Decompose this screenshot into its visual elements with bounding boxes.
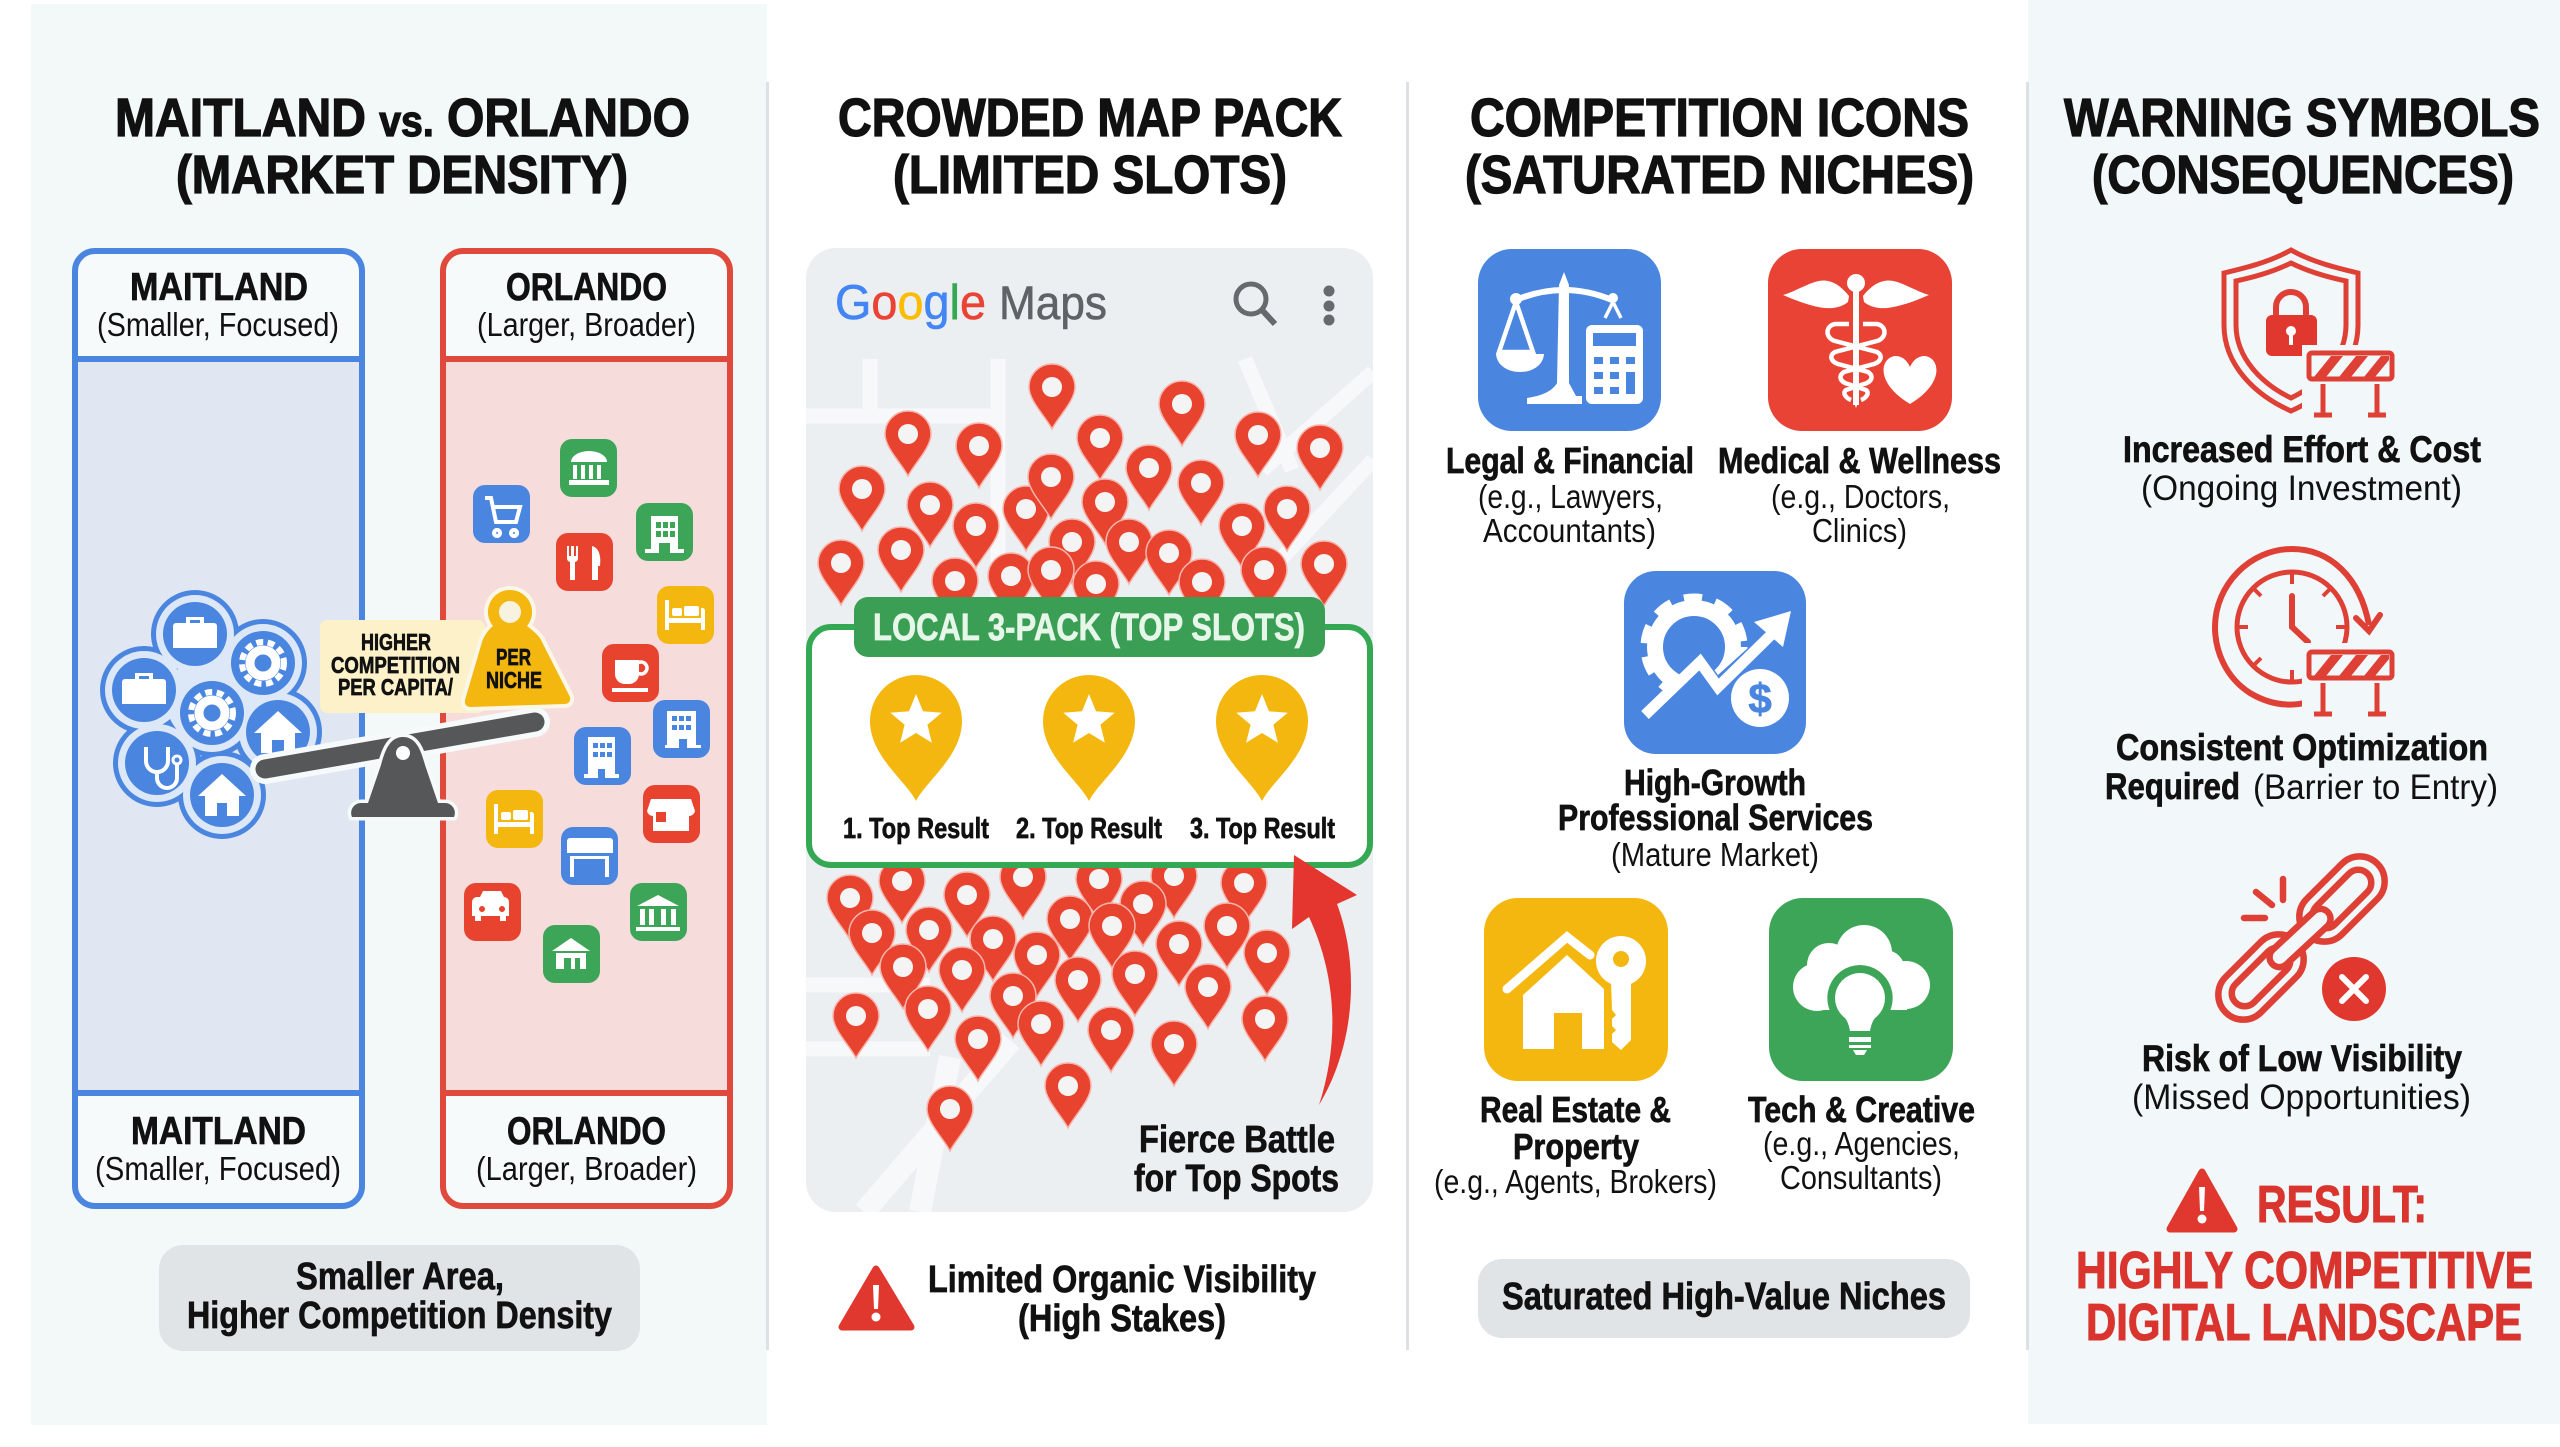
label: legal and financial: Accountants) (1483, 512, 1656, 549)
label: local 3-pack (854, 597, 1325, 657)
icon: shield and barrier (2224, 250, 2397, 420)
label: consistent optimization: Required (2105, 766, 2240, 807)
arrow: fierce battle (1292, 855, 1357, 1105)
panel: Maitland vs Orlando (75, 88, 730, 1351)
label: high-growth services (1558, 762, 1873, 873)
panel: Warning symbols (2064, 88, 2540, 1352)
icons: Orlando business tiles (464, 439, 714, 983)
icon: clock and barrier (2215, 549, 2397, 718)
result: highly competitive: RESULT: (2257, 1176, 2427, 1234)
label: increased effort: Increased Effort & Cost (2123, 429, 2481, 470)
weight: per niche: PER (496, 644, 531, 670)
local 3-pack box (809, 597, 1370, 865)
title: crowded map pack (838, 88, 1342, 205)
label: fierce battle (1134, 1119, 1339, 1200)
Orlando box: ORLANDO (507, 1110, 666, 1153)
gold pin 3: 3. Top Result (1190, 813, 1335, 845)
title: market density: MAITLAND vs. ORLANDO (115, 88, 690, 148)
Orlando box: (Larger, Broader) (477, 306, 696, 343)
label: local 3-pack: LOCAL 3-PACK (TOP SLOTS) (873, 607, 1305, 649)
label: tech and creative (1748, 1089, 1975, 1196)
panel: Crowded map pack (806, 88, 1373, 1340)
icon: medical and wellness (1768, 249, 1952, 431)
Maitland box: (Smaller, Focused) (97, 306, 339, 343)
Maitland box: MAITLAND (130, 266, 308, 309)
icon: legal and financial (1478, 249, 1661, 431)
Orlando box: ORLANDO (506, 266, 667, 309)
callout: higher competition: COMPETITION (331, 652, 460, 678)
bank (569, 451, 609, 485)
label: increased effort: (Ongoing Investment) (2141, 469, 2462, 508)
icon: high-growth services (1624, 571, 1806, 754)
label: high-growth services: (Mature Market) (1611, 836, 1819, 873)
caption: limited organic visibility: (High Stakes) (1018, 1298, 1226, 1340)
icon: tech and creative (1769, 898, 1953, 1081)
gold pin 1 (843, 675, 989, 845)
Maitland box (75, 251, 362, 1206)
gold pin 3 (1190, 675, 1335, 845)
icon: high-growth services: $ (1748, 675, 1772, 722)
Maitland box: (Smaller, Focused) (95, 1150, 341, 1187)
label: real estate: Real Estate & (1480, 1089, 1671, 1130)
caption: saturated niches (1478, 1259, 1970, 1338)
gold pin 2 (1016, 675, 1162, 845)
map card (806, 248, 1373, 1212)
label: legal and financial: (e.g., Lawyers, (1478, 478, 1663, 515)
panel: Competition icons (1434, 88, 2001, 1338)
weight: per niche (465, 590, 570, 707)
title: competition icons: (SATURATED NICHES) (1465, 145, 1974, 205)
title: crowded map pack: (LIMITED SLOTS) (893, 145, 1287, 205)
label: fierce battle: for Top Spots (1134, 1158, 1339, 1200)
callout: higher competition (320, 620, 485, 713)
label: medical and wellness: (e.g., Doctors, (1771, 478, 1950, 515)
gold pin 1: 1. Top Result (843, 813, 989, 845)
label: medical and wellness (1718, 440, 2001, 549)
Orlando box (443, 251, 730, 1206)
label: risk of low visibility: Risk of Low Visibility (2142, 1038, 2462, 1079)
caption: limited organic visibility (842, 1259, 1316, 1340)
label: real estate: (e.g., Agents, Brokers) (1434, 1163, 1717, 1200)
result: highly competitive (2076, 1172, 2533, 1352)
caption: smaller area: Higher Competition Density (187, 1295, 612, 1337)
label: fierce battle: Fierce Battle (1139, 1119, 1335, 1161)
icon: search and menu (1236, 284, 1334, 326)
title: competition icons (1465, 88, 1974, 205)
title: market density: (MARKET DENSITY) (176, 145, 628, 205)
label: high-growth services: Professional Services (1558, 797, 1873, 838)
icon: Maitland business cluster (100, 590, 322, 839)
callout: higher competition: HIGHER (361, 629, 431, 655)
label: legal and financial: Legal & Financial (1446, 440, 1694, 481)
label: increased effort (2123, 429, 2481, 508)
label: legal and financial (1446, 440, 1694, 549)
label: tech and creative: (e.g., Agencies, (1763, 1125, 1960, 1162)
label: tech and creative: Consultants) (1780, 1159, 1942, 1196)
label: real estate (1434, 1089, 1717, 1200)
label: risk of low visibility: (Missed Opportunities) (2132, 1078, 2471, 1117)
label: consistent optimization (2105, 727, 2498, 807)
label: consistent optimization: (Barrier to Entry) (2253, 768, 2498, 807)
Maitland box: MAITLAND (131, 1110, 306, 1153)
label: medical and wellness: Medical & Wellness (1718, 440, 2001, 481)
caption: smaller area: Smaller Area, (296, 1256, 504, 1298)
title: warning symbols (2064, 88, 2540, 205)
crowded red pins below the pack (827, 853, 1290, 1151)
label: tech and creative: Tech & Creative (1748, 1089, 1975, 1130)
title: competition icons: COMPETITION ICONS (1470, 88, 1969, 148)
caption: limited organic visibility: Limited Organic Visibility (928, 1259, 1316, 1301)
caption: smaller area (159, 1245, 640, 1351)
label: consistent optimization: Consistent Optimization (2116, 727, 2488, 768)
title: crowded map pack: CROWDED MAP PACK (838, 88, 1342, 148)
label: risk of low visibility (2132, 1038, 2471, 1117)
logo: Google Maps: Google (835, 276, 986, 330)
title: market density (115, 88, 690, 205)
seesaw balance (265, 722, 535, 817)
weight: per niche: NICHE (486, 667, 542, 693)
label: high-growth services: High-Growth (1624, 762, 1806, 803)
label: real estate: Property (1513, 1126, 1639, 1167)
caption: saturated niches: Saturated High-Value Niches (1502, 1276, 1946, 1318)
label: medical and wellness: Clinics) (1812, 512, 1907, 549)
icon: real estate (1484, 898, 1668, 1081)
Orlando box: (Larger, Broader) (476, 1150, 697, 1187)
crowded red pins above the pack (818, 364, 1347, 626)
gold pin 2: 2. Top Result (1016, 813, 1162, 845)
callout: higher competition: PER CAPITA/ (338, 674, 453, 700)
icon: broken chain (2208, 846, 2395, 1030)
logo: Google Maps (835, 276, 1107, 330)
logo: Google Maps: Maps (999, 276, 1107, 329)
